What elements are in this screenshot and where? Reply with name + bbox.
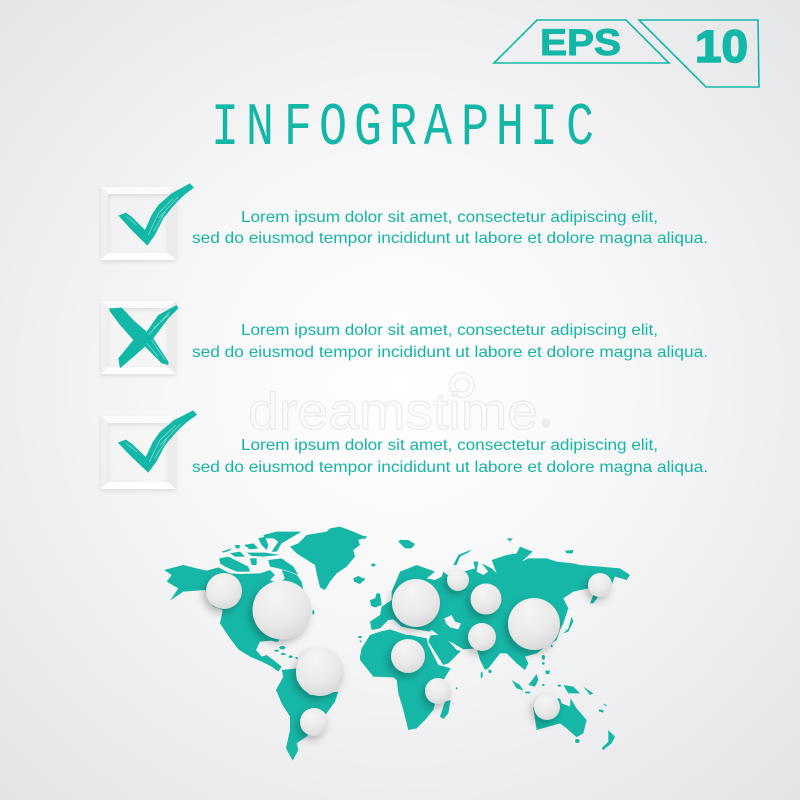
text block: sed do eiusmod tempor incididunt ut labore et dolore magna aliqua. bbox=[192, 344, 708, 361]
map: Iceland bbox=[353, 576, 365, 584]
bubble: South America south bbox=[300, 708, 328, 736]
text block: Lorem ipsum dolor sit amet, consectetur adipiscing elit, bbox=[241, 437, 658, 454]
text block bbox=[192, 209, 708, 247]
map: Australia bbox=[533, 698, 587, 737]
map: Greenland bbox=[290, 527, 367, 590]
bubble: Central Asia bbox=[470, 584, 502, 614]
map: Americas and Arctic bbox=[164, 527, 375, 761]
badge text: 10: 10 bbox=[695, 21, 748, 72]
badge: EPS outline bbox=[494, 20, 669, 63]
bubble: East Africa bbox=[425, 678, 451, 704]
text block: sed do eiusmod tempor incididunt ut labore et dolore magna aliqua. bbox=[192, 230, 708, 247]
map: South America bbox=[276, 668, 338, 761]
bubble: West Africa bbox=[391, 639, 425, 673]
checkbox frame bbox=[101, 416, 176, 489]
bubble: North America bbox=[252, 580, 312, 640]
text block: sed do eiusmod tempor incididunt ut labore et dolore magna aliqua. bbox=[192, 459, 708, 476]
data bubbles on map bbox=[206, 569, 612, 736]
bubble: Australia bbox=[534, 694, 560, 720]
bubble: South Asia bbox=[468, 623, 496, 651]
bubble: China bbox=[508, 598, 560, 650]
bubble: Russia west bbox=[447, 569, 469, 591]
world map bbox=[164, 527, 630, 761]
bubble: Europe bbox=[392, 579, 440, 627]
checkbox frame bbox=[101, 187, 176, 260]
map: Eurasia bbox=[370, 547, 630, 670]
bubble: Far East bbox=[588, 573, 612, 597]
row 2: cross item bbox=[101, 301, 708, 374]
title: INFOGRAPHIC bbox=[211, 95, 594, 163]
text block bbox=[192, 322, 708, 361]
bubble: Alaska bbox=[206, 573, 242, 609]
text block: Lorem ipsum dolor sit amet, consectetur adipiscing elit, bbox=[241, 322, 658, 339]
badge text: EPS: EPS bbox=[540, 22, 621, 63]
map: Africa bbox=[360, 629, 451, 730]
text block: Lorem ipsum dolor sit amet, consectetur adipiscing elit, bbox=[241, 209, 658, 226]
checkbox frame bbox=[101, 301, 176, 374]
map: Madagascar bbox=[440, 700, 451, 719]
map: Canadian islands bbox=[219, 532, 302, 575]
text block bbox=[192, 437, 708, 476]
badge: EPS 10 bbox=[494, 20, 759, 87]
map: Old World bbox=[360, 536, 630, 750]
bubble: South America north bbox=[296, 648, 344, 696]
map: New Zealand and Tasmania bbox=[575, 730, 615, 750]
icon: check mark bbox=[118, 410, 197, 473]
map: East and Southeast Asian islands bbox=[456, 595, 607, 713]
map: Caspian Sea bbox=[444, 615, 461, 629]
map: Caribbean islands bbox=[274, 564, 375, 659]
badge: 10 outline bbox=[639, 20, 759, 87]
map: North and Central America bbox=[164, 565, 307, 672]
icon: check mark bbox=[118, 183, 194, 246]
watermark: dreamstime bbox=[248, 383, 538, 441]
icon: cross mark bbox=[109, 305, 178, 368]
row 3: check item bbox=[101, 410, 708, 489]
row 1: check item bbox=[101, 183, 708, 260]
map: UK and northern islands bbox=[360, 536, 573, 607]
